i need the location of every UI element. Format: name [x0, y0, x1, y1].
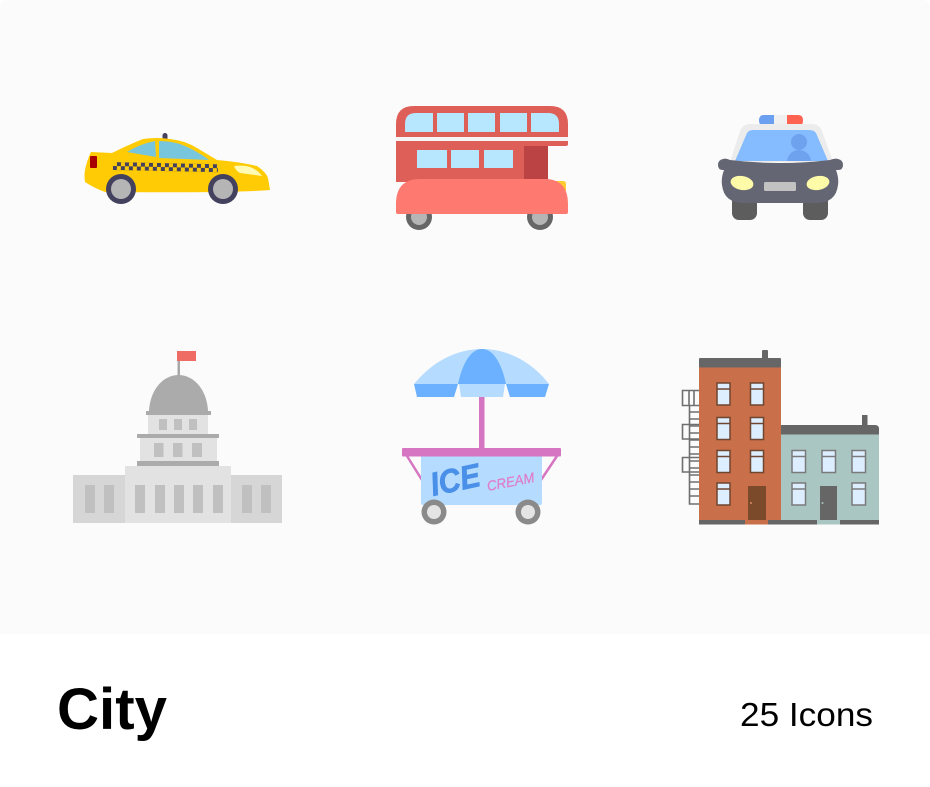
cart struts — [407, 456, 557, 480]
taxi roof sign — [162, 133, 168, 141]
taxi checker stripe — [113, 162, 218, 172]
taxi headlight — [234, 166, 262, 176]
police wheels — [732, 195, 828, 220]
brick building door — [748, 486, 766, 520]
brick building — [699, 367, 781, 520]
police plate — [764, 182, 796, 191]
capitol upper tiers — [140, 415, 217, 461]
icon: police car — [718, 115, 843, 220]
brick building windows — [717, 383, 764, 505]
taxi windows — [127, 141, 209, 160]
police cabin — [730, 124, 833, 162]
cart umbrella pole — [479, 397, 484, 449]
bus lower deck — [396, 141, 568, 200]
stoops — [745, 520, 840, 524]
cart box — [421, 455, 542, 505]
icon: capitol building — [73, 351, 282, 523]
police light bar — [759, 115, 803, 126]
capitol bands — [137, 411, 219, 466]
cart wheels — [422, 500, 540, 524]
icon: taxi — [84, 133, 270, 204]
bus lower body — [396, 179, 568, 214]
green building — [781, 434, 879, 520]
cart shelf — [402, 448, 561, 456]
icon: city buildings — [682, 350, 879, 524]
police car body — [718, 159, 843, 203]
green building door — [820, 486, 837, 520]
bus upper windows — [405, 113, 559, 132]
capitol dome — [149, 375, 208, 411]
brick building roof — [699, 350, 781, 368]
green building roof — [781, 415, 879, 434]
icon: double decker bus — [396, 106, 568, 230]
capitol wings — [73, 475, 282, 523]
taxi body — [84, 138, 270, 192]
capitol flag — [177, 351, 196, 376]
capitol centre block — [125, 466, 231, 523]
pavement — [699, 520, 879, 524]
bus lower windows — [417, 150, 513, 168]
taxi front wheel — [208, 174, 238, 204]
bus door — [524, 146, 548, 181]
fire escape — [682, 390, 699, 504]
bus upper deck — [396, 106, 568, 137]
bus wheels — [406, 204, 553, 230]
title: City — [57, 677, 167, 742]
ICE label: ICE — [427, 456, 484, 503]
taxi tail light — [90, 156, 97, 168]
police headlights — [729, 174, 831, 192]
bus headlight — [555, 181, 566, 191]
capitol windows — [85, 419, 271, 513]
icon count: 25 Icons — [740, 696, 873, 733]
police windshield — [735, 130, 828, 161]
icon: ice cream cart — [402, 349, 561, 524]
umbrella canopy — [414, 349, 549, 397]
police driver — [787, 134, 811, 161]
taxi rear wheel — [106, 174, 136, 204]
CREAM label: CREAM — [486, 469, 536, 494]
green building windows — [792, 450, 866, 505]
bus white stripe — [396, 137, 568, 141]
